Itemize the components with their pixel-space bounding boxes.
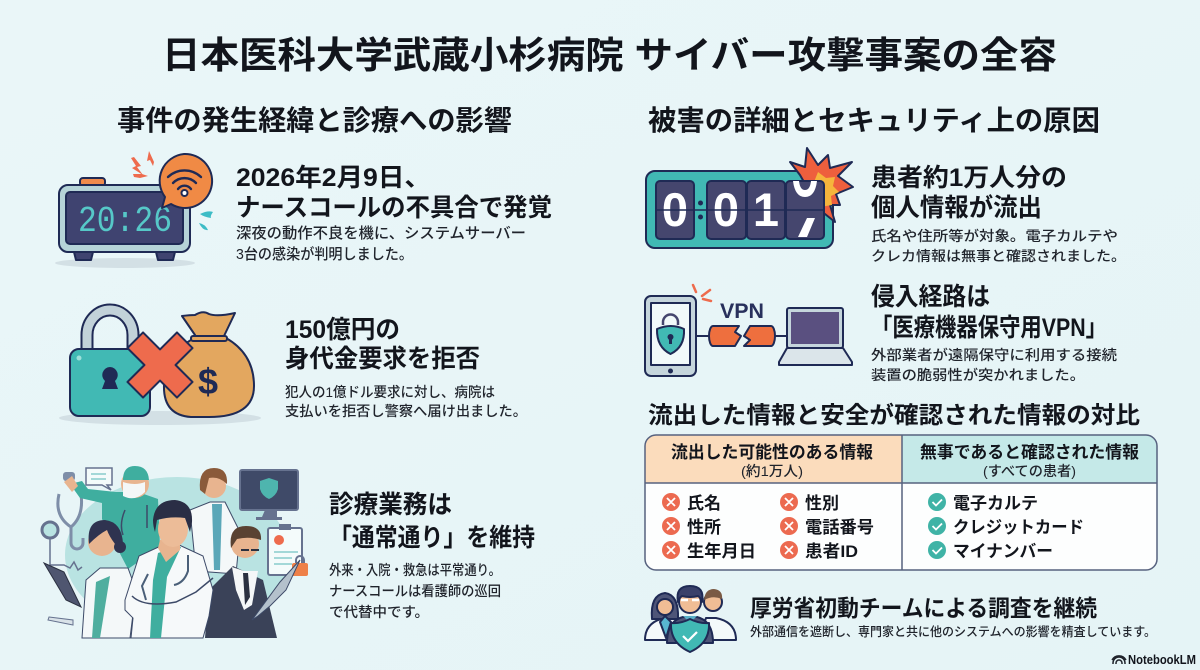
icon: alarm clock with wifi bubble <box>55 151 213 268</box>
text block: nurse call discovery: ナースコールの不具合で発覚 <box>236 194 552 222</box>
text block: ransom refused: 犯人の1億ドル要求に対し、病院は <box>285 384 495 400</box>
illustration: medical team <box>42 466 308 638</box>
icon: flip counter with burst <box>646 148 853 248</box>
table header: leaked: (約1万人) <box>741 463 803 479</box>
text block: data leak: クレカ情報は無事と確認されました。 <box>871 248 1126 264</box>
text block: ransom refused <box>285 316 527 419</box>
list: leaked items <box>662 493 874 561</box>
heading: comparison: 流出した情報と安全が確認された情報の対比 <box>648 401 1141 428</box>
text block: operations maintained <box>329 491 535 620</box>
text block: ministry investigation: 厚労省初動チームによる調査を継続 <box>750 595 1097 621</box>
text block: data leak <box>871 164 1126 264</box>
icon: padlock, cross and money bag: $ <box>198 361 218 402</box>
title: 日本医科大学武蔵小杉病院 サイバー攻撃事案の全容 <box>162 35 1057 76</box>
suit man <box>205 566 277 638</box>
icon: broken VPN link: VPN <box>720 300 764 323</box>
list: leaked items: 性所 <box>687 518 721 537</box>
table header: safe <box>920 443 1139 479</box>
text block: data leak: 個人情報が流出 <box>871 193 1042 222</box>
text block: ransom refused: 支払いを拒否し警察へ届け出ました。 <box>285 403 527 419</box>
table header: leaked: 流出した可能性のある情報 <box>671 442 873 462</box>
list: safe items: マイナンバー <box>953 542 1053 561</box>
text block: intrusion route: 侵入経路は <box>871 283 990 311</box>
monitor <box>240 470 298 510</box>
text block: data leak: 患者約1万人分の <box>871 164 1067 192</box>
text block: intrusion route: 装置の脆弱性が突かれました。 <box>871 367 1085 383</box>
lead doctor <box>125 544 213 638</box>
doctor right back <box>190 502 240 574</box>
icon: flip counter with burst: 0 <box>662 183 688 236</box>
list: leaked items: 電話番号 <box>805 518 874 537</box>
text block: operations maintained: 外来・入院・救急は平常通り。 <box>329 562 501 578</box>
list: safe items <box>928 493 1084 561</box>
text block: ransom refused: 身代金要求を拒否 <box>285 345 480 373</box>
text block: operations maintained: 「通常通り」を維持 <box>329 524 535 552</box>
text block: operations maintained: ナースコールは看護師の巡回 <box>329 583 501 599</box>
text block: ransom refused: 150億円の <box>285 316 400 344</box>
list: leaked items: 患者ID <box>805 542 858 561</box>
icon: investigation team <box>645 586 736 652</box>
clipboard <box>268 528 302 575</box>
text block: nurse call discovery: 2026年2月9日、 <box>236 164 431 192</box>
text block: intrusion route: 外部業者が遠隔保守に利用する接続 <box>871 347 1117 363</box>
icon: padlock, cross and money bag <box>59 310 261 425</box>
text block: ministry investigation: 外部通信を遮断し、専門家と共に他のシステムへの影響を精査しています。 <box>750 624 1156 639</box>
heading: right column: 被害の詳細とセキュリティ上の原因 <box>648 105 1100 136</box>
text block: nurse call discovery <box>236 164 552 263</box>
text block: intrusion route: 「医療機器保守用VPN」 <box>871 314 1107 342</box>
list: safe items: 電子カルテ <box>953 494 1038 513</box>
list: safe items: クレジットカード <box>953 518 1084 537</box>
heading: left column: 事件の発生経緯と診療への影響 <box>117 105 512 136</box>
nurse left <box>82 568 136 638</box>
icon: flip counter with burst: 1 <box>753 183 779 236</box>
text block: intrusion route <box>871 283 1117 383</box>
surgeon <box>70 481 160 569</box>
table header: leaked <box>671 442 873 479</box>
comparison table <box>645 435 1157 570</box>
text block: operations maintained: 診療業務は <box>329 491 452 519</box>
table header: safe: 無事であると確認された情報 <box>920 443 1139 462</box>
list: leaked items: 性別 <box>805 494 839 513</box>
icon: alarm clock with wifi bubble: 20:26 <box>78 201 172 242</box>
icon: flip counter with burst: 0 <box>713 183 739 236</box>
list: leaked items: 氏名 <box>687 494 721 513</box>
list: leaked items: 生年月日 <box>687 541 756 561</box>
text block: operations maintained: で代替中です。 <box>329 604 429 620</box>
text block: data leak: 氏名や住所等が対象。電子カルテや <box>871 228 1118 244</box>
text block: ministry investigation <box>750 595 1156 639</box>
text block: nurse call discovery: 深夜の動作不良を機に、システムサーバー <box>236 225 526 242</box>
text block: nurse call discovery: 3台の感染が判明しました。 <box>236 245 413 263</box>
table header: safe: (すべての患者) <box>983 463 1076 479</box>
icon: broken VPN link <box>645 285 852 376</box>
